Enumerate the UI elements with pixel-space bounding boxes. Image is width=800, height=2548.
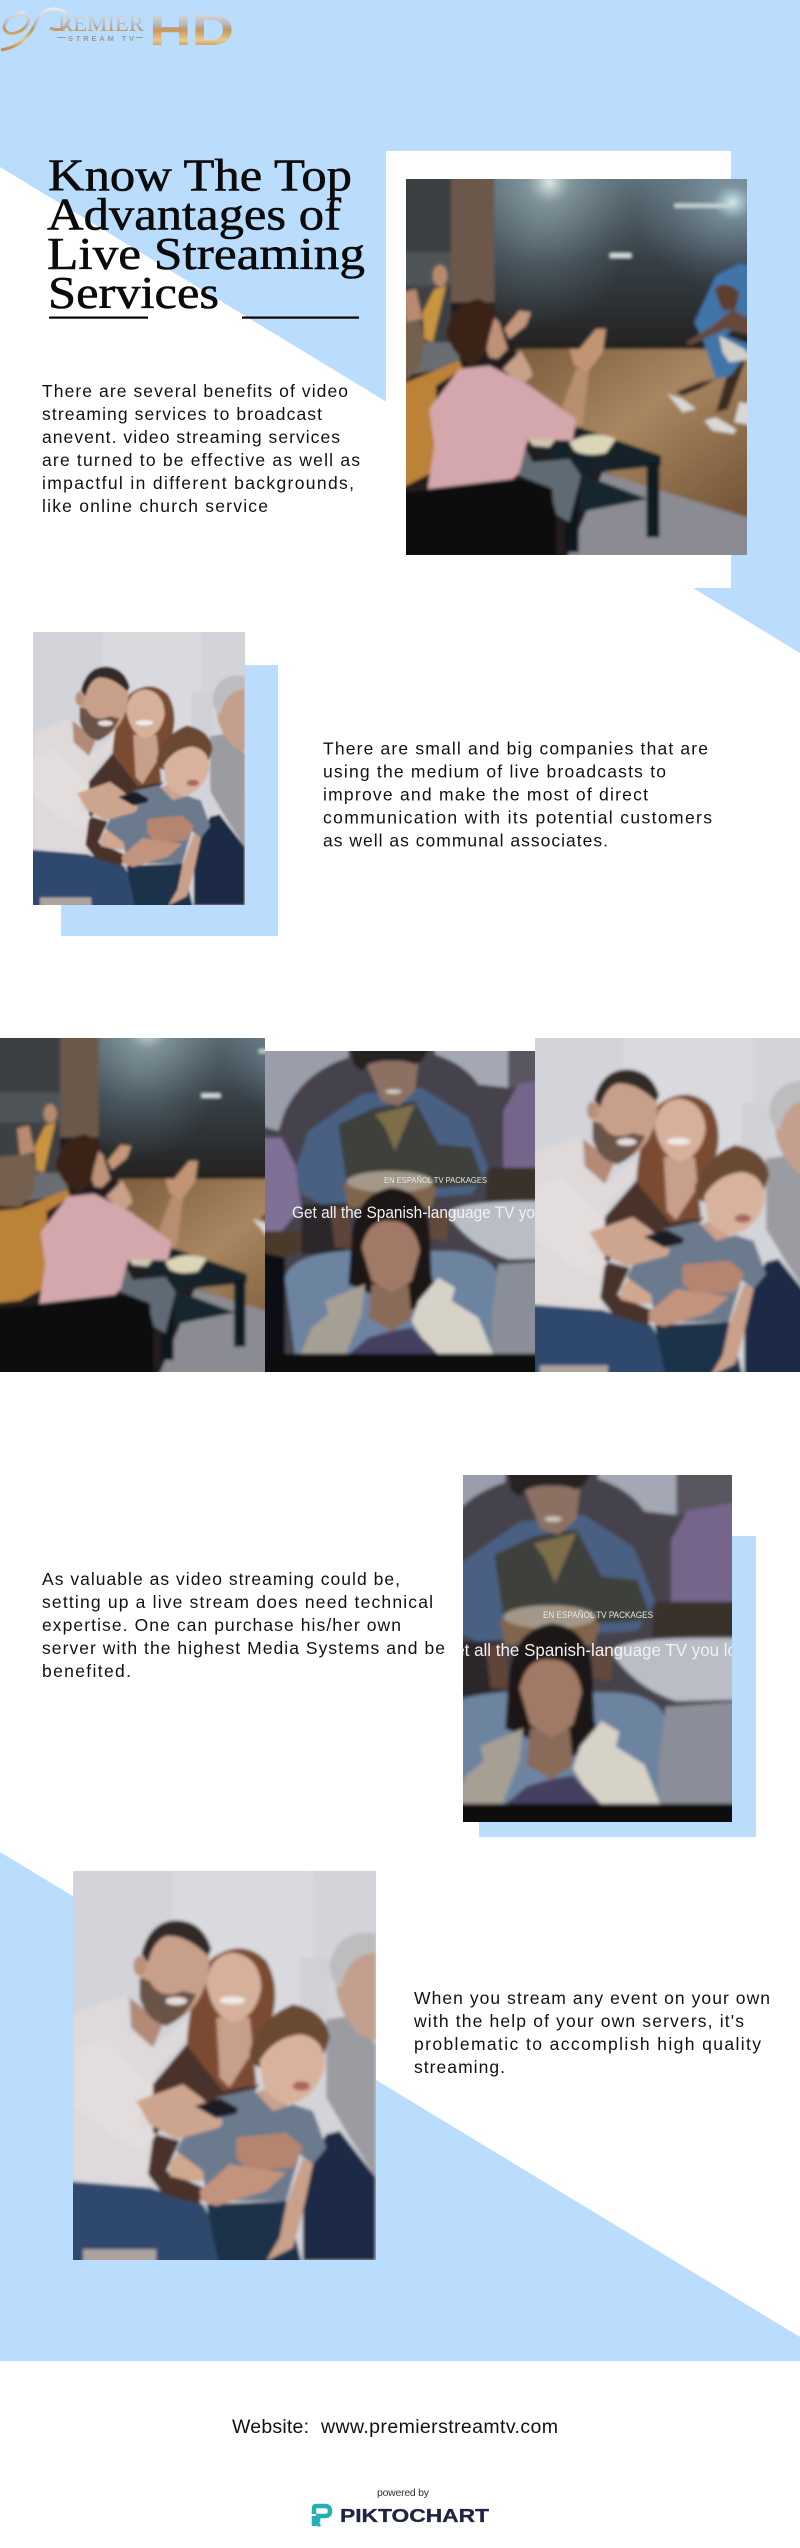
- paragraph: technical expertise: server with the highest Media Systems and be: [42, 1638, 445, 1658]
- paragraph: technical expertise: expertise. One can purchase his/her own: [42, 1615, 401, 1635]
- paragraph: own servers: problematic to accomplish high quality: [414, 2034, 761, 2054]
- photo: family with remote: [33, 632, 245, 905]
- logo: Premier Stream TV HD: HD: [149, 6, 234, 55]
- photo strip: family crop: [535, 1038, 800, 1372]
- intro paragraph: [42, 381, 360, 516]
- title: Live Streaming: [47, 229, 365, 279]
- website line: Website:: [232, 2416, 309, 2438]
- logo: Premier Stream TV HD: STREAM TV: [68, 34, 134, 43]
- photo: couple with Spanish TV banner: EN ESPAÑOL TV PACKAGES: [543, 1610, 653, 1620]
- title: Services: [48, 268, 219, 318]
- paragraph: technical expertise: [42, 1569, 445, 1681]
- title underline right: [242, 316, 359, 319]
- paragraph: companies: as well as communal associates.: [323, 830, 608, 850]
- paragraph: own servers: [413, 1988, 770, 2077]
- paragraph: companies: communication with its potential customers: [323, 808, 712, 828]
- top blue diagonal background: [0, 0, 800, 653]
- photo strip: couple with Spanish TV banner: [265, 1051, 535, 1372]
- title underline left: [49, 316, 148, 319]
- Piktochart wordmark: PIKTOCHART: [340, 2506, 489, 2526]
- paragraph: own servers: streaming.: [414, 2057, 505, 2077]
- panel: blue block behind family photo: [61, 665, 278, 936]
- panel: white frame behind stadium photo: [386, 151, 731, 588]
- intro paragraph: impactful in different backgrounds,: [42, 473, 354, 493]
- logo: Premier Stream TV HD: [1, 6, 234, 55]
- intro paragraph: are turned to be effective as well as: [42, 450, 360, 470]
- paragraph: own servers: When you stream any event on your own: [414, 1988, 770, 2008]
- panel: blue block behind Spanish TV photo: [479, 1536, 756, 1837]
- intro paragraph: There are several benefits of video: [42, 381, 348, 401]
- title: Know The Top: [48, 150, 352, 200]
- intro paragraph: like online church service: [42, 496, 268, 516]
- website line: www.premierstreamtv.com: [320, 2416, 558, 2438]
- photo strip: couple with Spanish TV banner: Get all the Spanish-language TV yo: [292, 1204, 535, 1222]
- bottom blue diagonal background: [0, 1852, 800, 2361]
- paragraph: companies: There are small and big companies that are: [323, 738, 708, 758]
- photo: couple with Spanish TV banner: [463, 1475, 732, 1822]
- paragraph: companies: improve and make the most of direct: [323, 784, 648, 804]
- logo: Premier Stream TV HD: REMIER: [58, 11, 144, 36]
- photo strip: stadium crop: [0, 1038, 265, 1372]
- title: [47, 150, 365, 318]
- intro paragraph: anevent. video streaming services: [42, 427, 340, 447]
- paragraph: technical expertise: setting up a live stream does need technical: [42, 1592, 433, 1612]
- intro paragraph: streaming services to broadcast: [42, 404, 322, 424]
- photo strip: couple with Spanish TV banner: EN ESPAÑOL TV PACKAGES: [384, 1175, 487, 1185]
- paragraph: companies: [323, 738, 712, 850]
- paragraph: companies: using the medium of live broadcasts to: [323, 762, 666, 782]
- photo: couple with Spanish TV banner: Get all the Spanish-language TV you lo: [442, 1640, 737, 1660]
- photo: friends watching basketball: [406, 179, 747, 555]
- paragraph: own servers: with the help of your own servers, it's: [413, 2011, 744, 2031]
- powered by: powered by: [377, 2487, 430, 2499]
- paragraph: technical expertise: benefited.: [42, 1661, 131, 1681]
- icon: Piktochart logo mark: [314, 2506, 330, 2526]
- title: Advantages of: [47, 190, 341, 240]
- photo: family large: [73, 1871, 376, 2260]
- paragraph: technical expertise: As valuable as video streaming could be,: [42, 1569, 400, 1589]
